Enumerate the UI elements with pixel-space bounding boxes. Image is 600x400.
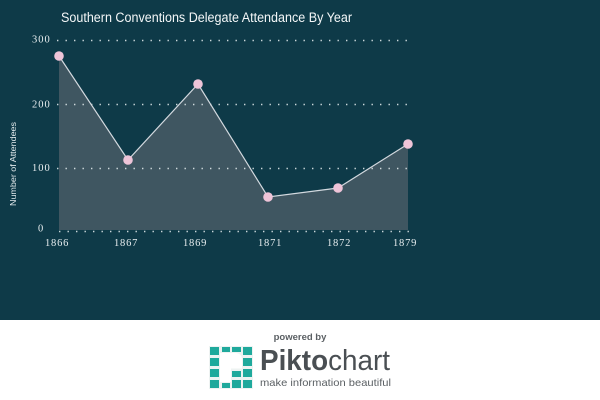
x-axis labels: 1866 — [45, 238, 69, 249]
y-axis labels: 200 — [32, 100, 51, 110]
y-axis labels: 0 — [38, 224, 44, 234]
footer: powered by: powered by — [274, 332, 327, 343]
panel: chart background — [0, 0, 600, 320]
line series — [59, 56, 408, 197]
gridlines — [57, 40, 414, 232]
y-axis labels — [32, 34, 51, 234]
x-axis labels: 1871 — [258, 238, 282, 249]
y-axis labels: 100 — [32, 163, 51, 174]
wordmark: Piktochart — [260, 345, 390, 377]
x-axis labels — [45, 238, 417, 249]
x-axis labels: 1872 — [327, 238, 351, 249]
data points — [54, 51, 413, 202]
y-axis title: Number of Attendees — [9, 122, 18, 206]
y-axis labels: 300 — [32, 34, 51, 46]
x-axis labels: 1867 — [114, 238, 138, 249]
x-axis labels: 1869 — [183, 238, 207, 249]
icon: Piktochart logo — [209, 346, 253, 389]
area fill — [59, 56, 408, 230]
x-axis labels: 1879 — [393, 238, 417, 249]
title: Southern Conventions Delegate Attendance By Year — [61, 10, 352, 25]
tagline: make information beautiful — [260, 377, 391, 389]
